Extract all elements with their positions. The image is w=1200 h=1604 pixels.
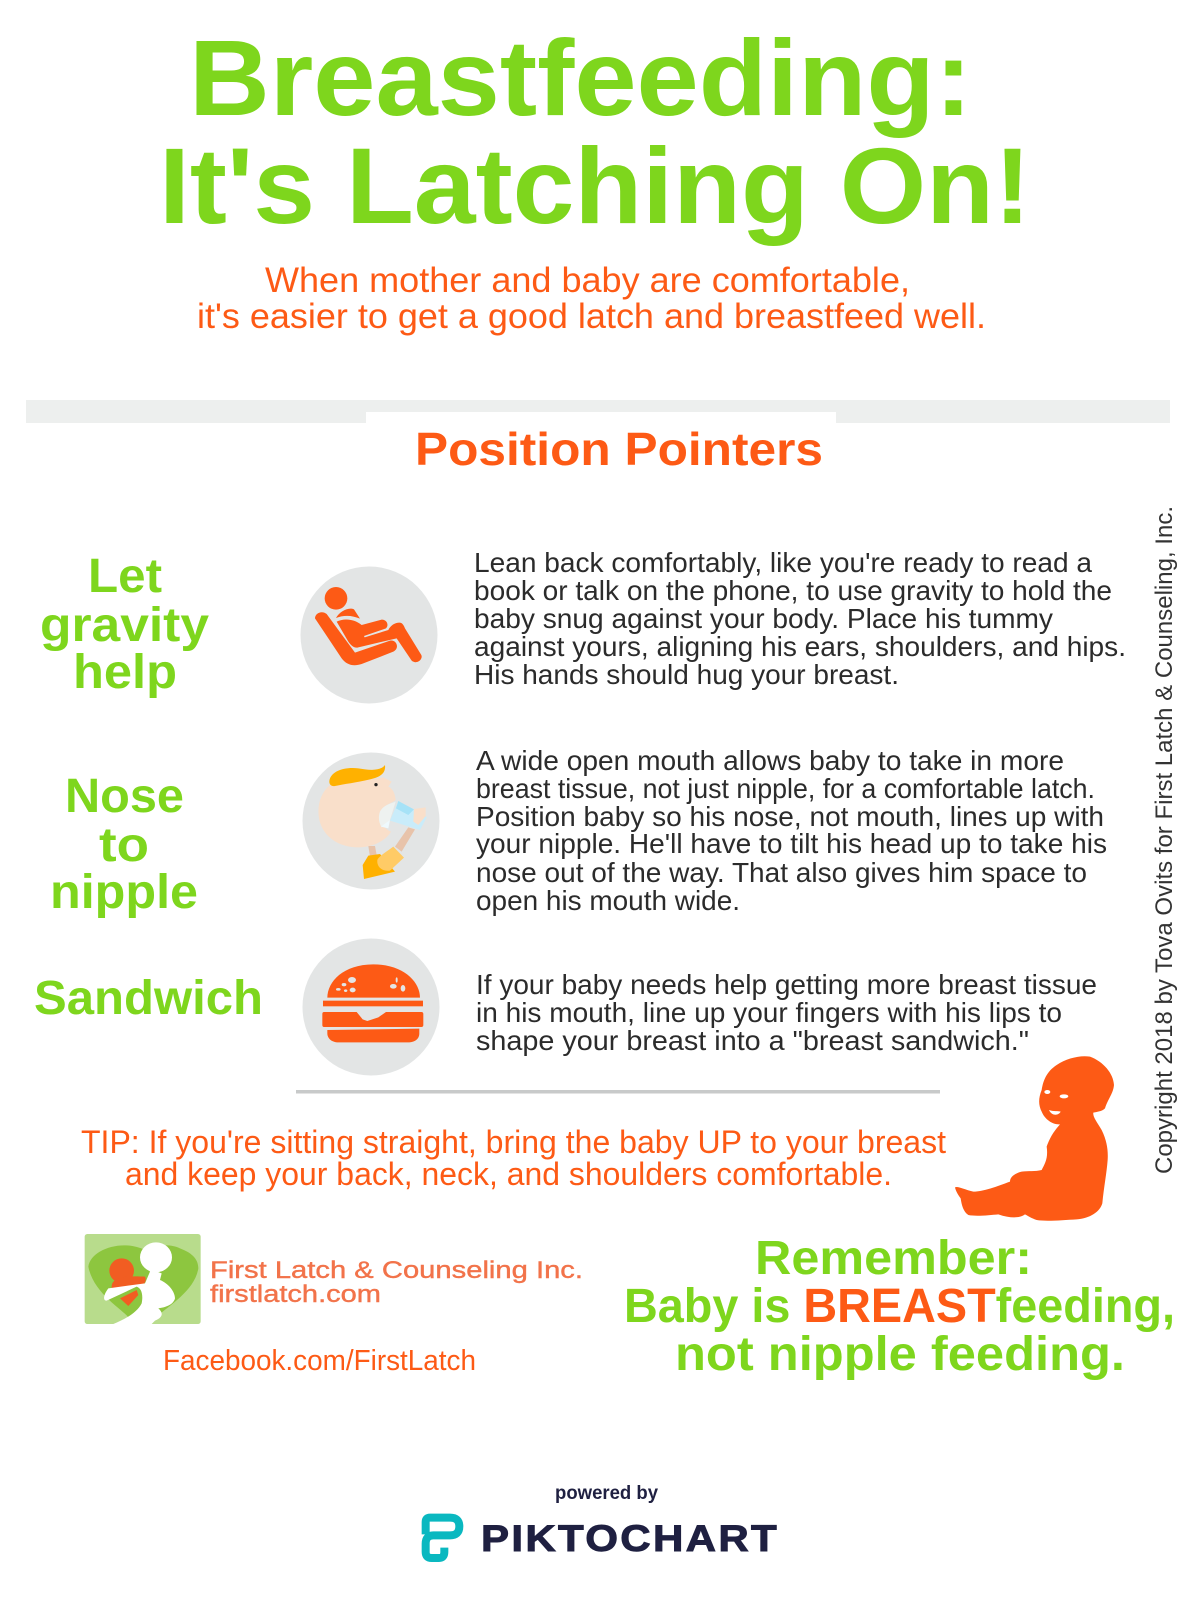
label: let gravity help: gravity [40,599,209,652]
title: Breastfeeding: [189,17,972,138]
logo: first latch: firstlatch.com [210,1281,381,1308]
text: gravity: baby snug against your body. Place his tummy [474,603,1053,634]
text: gravity: His hands should hug your breast. [474,659,899,690]
text: gravity [474,547,1126,690]
text: nose to nipple: open his mouth wide. [476,885,740,916]
facebook link: Facebook.com/FirstLatch [163,1345,476,1377]
header band [26,400,1170,424]
text: sandwich: shape your breast into a "breast sandwich." [476,1025,1029,1056]
logo: first latch: First Latch & Counseling Inc. [210,1257,583,1284]
remember callout [624,1232,1175,1381]
tip: TIP: If you're sitting straight, bring the baby UP to your breast [81,1124,946,1160]
icon: reclining person [300,566,438,704]
title: It's Latching On! [159,125,1031,246]
tip [81,1124,946,1192]
subtitle: When mother and baby are comfortable, [265,261,910,300]
remember callout: not nipple feeding. [675,1328,1125,1381]
text: sandwich: If your baby needs help getting more breast tissue [476,969,1097,1000]
remember callout: Baby is BREASTfeeding, [624,1280,1175,1333]
text: nose to nipple [476,745,1107,916]
text: gravity: against yours, aligning his ears, shoulders, and hips. [474,631,1126,662]
subtitle [197,261,986,336]
icon: burger [302,938,440,1076]
remember callout: Remember: [755,1232,1032,1285]
label: nose to nipple: nipple [50,866,198,919]
label: sandwich: Sandwich [34,972,263,1025]
text: nose to nipple: nose out of the way. That also gives him space to [476,857,1087,888]
icon: baby silhouette [955,1056,1114,1221]
text: nose to nipple: A wide open mouth allows baby to take in more [476,745,1064,776]
tip: and keep your back, neck, and shoulders comfortable. [125,1156,892,1192]
text: nose to nipple: breast tissue, not just nipple, for a comfortable latch. [476,773,1095,804]
text: nose to nipple: Position baby so his nose, not mouth, lines up with [476,801,1104,832]
heading: position pointers: Position Pointers [415,423,823,475]
text: gravity: Lean back comfortably, like you're ready to read a [474,547,1093,578]
text: nose to nipple: your nipple. He'll have to tilt his head up to take his [476,828,1107,859]
powered by: powered by [555,1483,658,1504]
logo: first latch [85,1234,583,1324]
logo: piktochart: PIKTOCHART [481,1518,779,1559]
label: let gravity help [40,550,209,699]
title [159,17,1031,246]
label: let gravity help: help [73,646,177,699]
text: sandwich [476,969,1097,1056]
subtitle: it's easier to get a good latch and breastfeed well. [197,297,986,336]
icon: baby drinking [302,752,440,890]
copyright: Copyright 2018 by Tova Ovits for First Latch & Counseling, Inc. [1151,506,1178,1174]
label: nose to nipple: to [99,819,149,872]
label: let gravity help: Let [88,550,162,603]
label: nose to nipple [50,770,198,919]
label: nose to nipple: Nose [65,770,184,823]
text: sandwich: in his mouth, line up your fingers with his lips to [476,997,1062,1028]
text: gravity: book or talk on the phone, to use gravity to hold the [474,575,1112,606]
